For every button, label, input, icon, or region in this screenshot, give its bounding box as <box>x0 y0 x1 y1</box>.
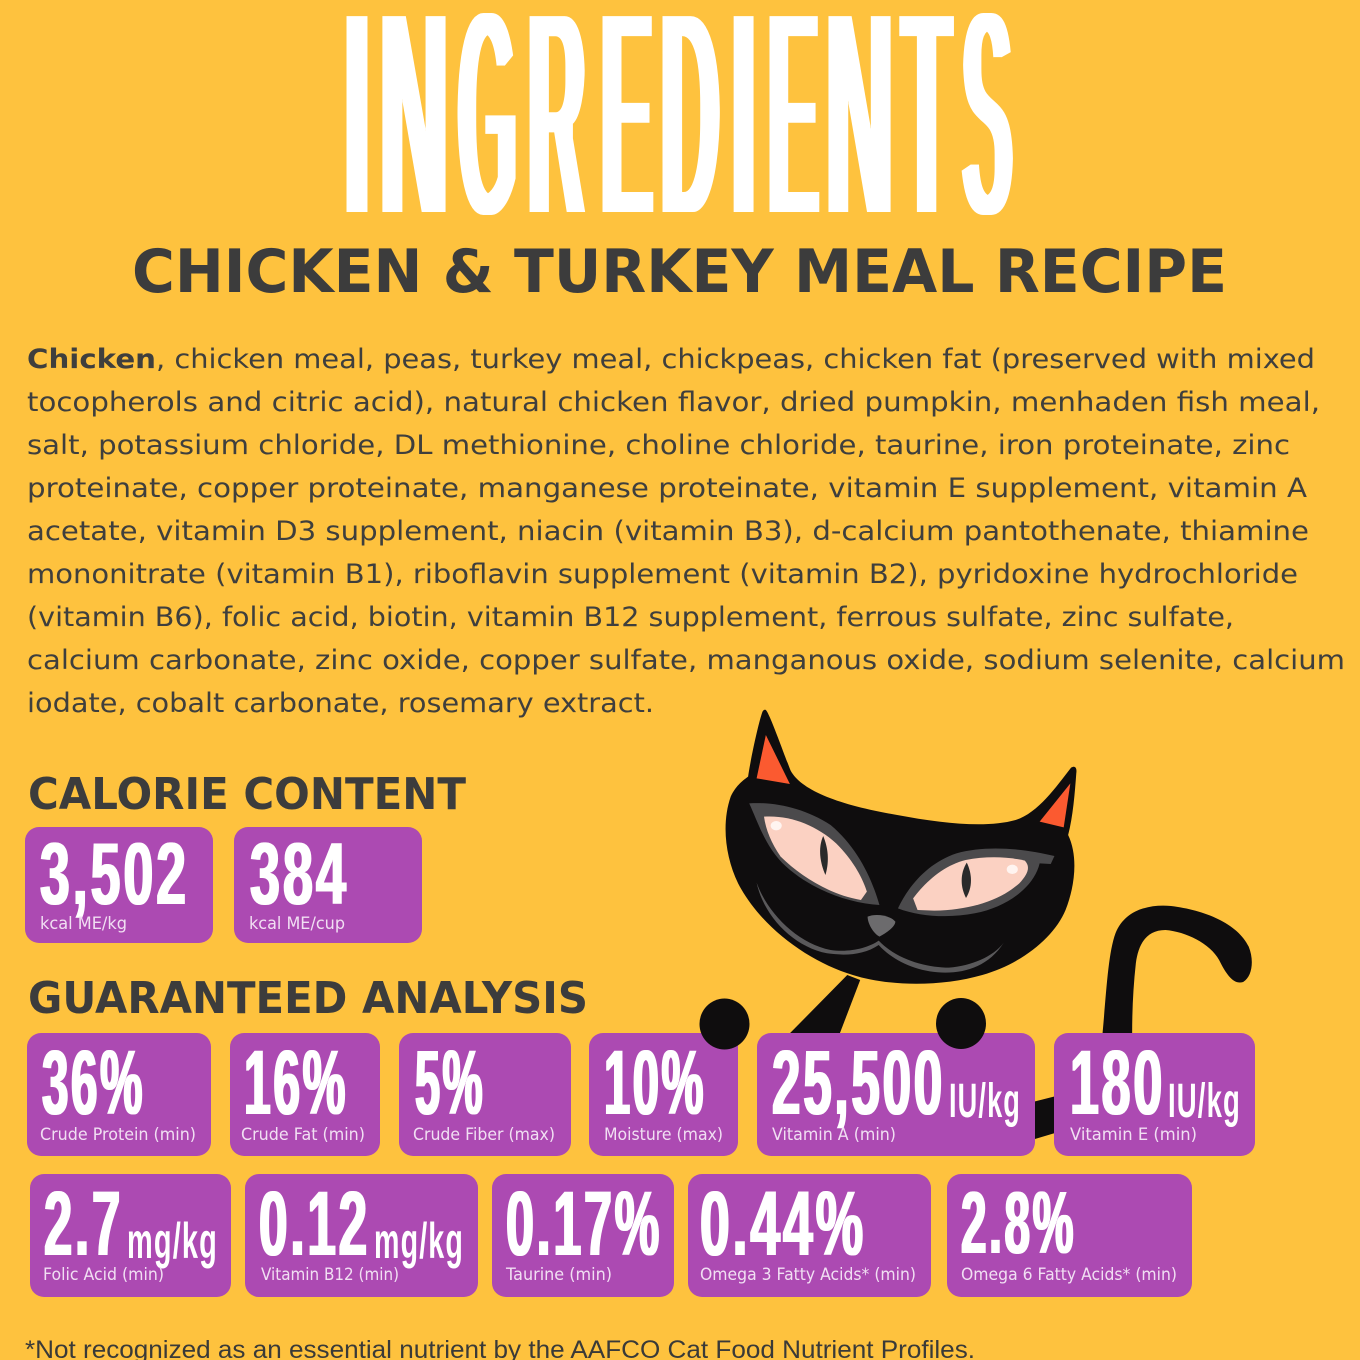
stat: taurine: 0.17% <box>506 1173 662 1275</box>
stat: crude protein: 36% <box>42 1032 145 1134</box>
ingredients text block: salt, potassium chloride, DL methionine, choline chloride, taurine, iron proteinate, zinc <box>27 430 1290 461</box>
stat: taurine <box>492 1173 674 1297</box>
stat: 384 kcal ME/cup: 384 <box>250 824 349 923</box>
stat: moisture: Moisture (max) <box>604 1125 723 1144</box>
stat: folic acid: mg/kg <box>127 1213 218 1269</box>
calorie content heading: CALORIE CONTENT <box>28 769 466 820</box>
stat: folic acid <box>30 1173 231 1297</box>
stat: vitamin A: IU/kg <box>949 1075 1021 1128</box>
ingredients text block: Chicken <box>27 344 156 375</box>
stat: vitamin E: 180 <box>1070 1032 1165 1134</box>
stat: omega 3 <box>688 1173 931 1297</box>
stat: vitamin E: IU/kg <box>1168 1075 1241 1128</box>
stat: 3,502 kcal ME/kg: 3,502 <box>40 824 189 923</box>
stat: folic acid: Folic Acid (min) <box>43 1265 164 1284</box>
stat: omega 3: 0.44% <box>700 1173 866 1275</box>
ingredients text block: tocopherols and citric acid), natural chicken flavor, dried pumpkin, menhaden fish meal, <box>27 387 1320 418</box>
illustration: black cat head, neck and tail <box>726 710 1252 1139</box>
stat: moisture: 10% <box>604 1032 706 1134</box>
stat: vitamin E <box>1054 1032 1255 1156</box>
ingredients text block: calcium carbonate, zinc oxide, copper sulfate, manganous oxide, sodium selenite, calcium <box>27 645 1345 676</box>
icon: left cat paw <box>700 998 750 1050</box>
ingredients text block: (vitamin B6), folic acid, biotin, vitamin B12 supplement, ferrous sulfate, zinc sulfate, <box>27 602 1234 633</box>
stat: 384 kcal ME/cup: kcal ME/cup <box>249 914 345 933</box>
stat: crude fiber <box>399 1032 571 1156</box>
stat: vitamin B12: mg/kg <box>374 1213 464 1269</box>
subtitle: CHICKEN & TURKEY MEAL RECIPE <box>132 237 1227 307</box>
stat: crude fat: Crude Fat (min) <box>241 1125 365 1144</box>
title <box>344 0 1012 284</box>
stat: omega 6: Omega 6 Fatty Acids* (min) <box>961 1265 1177 1284</box>
stat: vitamin A: Vitamin A (min) <box>772 1125 896 1144</box>
stat: omega 6: 2.8% <box>961 1173 1076 1272</box>
stat: crude fiber: Crude Fiber (max) <box>413 1125 555 1144</box>
stat: moisture <box>589 1032 738 1156</box>
stat: crude fat: 16% <box>244 1032 348 1134</box>
stat: vitamin E: Vitamin E (min) <box>1070 1125 1197 1144</box>
stat: vitamin B12: Vitamin B12 (min) <box>261 1265 399 1284</box>
stat: taurine: Taurine (min) <box>505 1265 612 1284</box>
guaranteed analysis heading: GUARANTEED ANALYSIS <box>28 973 588 1024</box>
ingredients text block: iodate, cobalt carbonate, rosemary extract. <box>27 688 654 719</box>
ingredients text block <box>27 344 1345 719</box>
stat: vitamin A <box>757 1032 1035 1156</box>
stat: crude fiber: 5% <box>415 1032 485 1134</box>
stat: folic acid: 2.7 <box>44 1173 123 1275</box>
stat: crude protein <box>27 1032 211 1156</box>
stat: crude protein: Crude Protein (min) <box>40 1125 196 1144</box>
stat: omega 3: Omega 3 Fatty Acids* (min) <box>700 1265 916 1284</box>
ingredients text block: , chicken meal, peas, turkey meal, chickpeas, chicken fat (preserved with mixed <box>156 344 1315 375</box>
icon: right cat paw <box>936 998 986 1049</box>
stat: 3,502 kcal ME/kg <box>25 824 213 943</box>
stat: 3,502 kcal ME/kg: kcal ME/kg <box>40 914 127 933</box>
ingredients text block: mononitrate (vitamin B1), riboflavin supplement (vitamin B2), pyridoxine hydrochloride <box>27 559 1298 590</box>
stat: vitamin B12: 0.12 <box>259 1173 370 1275</box>
stat: vitamin A: 25,500 <box>772 1032 945 1134</box>
ingredients text block: acetate, vitamin D3 supplement, niacin (vitamin B3), d-calcium pantothenate, thiamine <box>27 516 1309 547</box>
stat: crude fat <box>230 1032 380 1156</box>
ingredients text block: proteinate, copper proteinate, manganese proteinate, vitamin E supplement, vitamin A <box>27 473 1308 504</box>
